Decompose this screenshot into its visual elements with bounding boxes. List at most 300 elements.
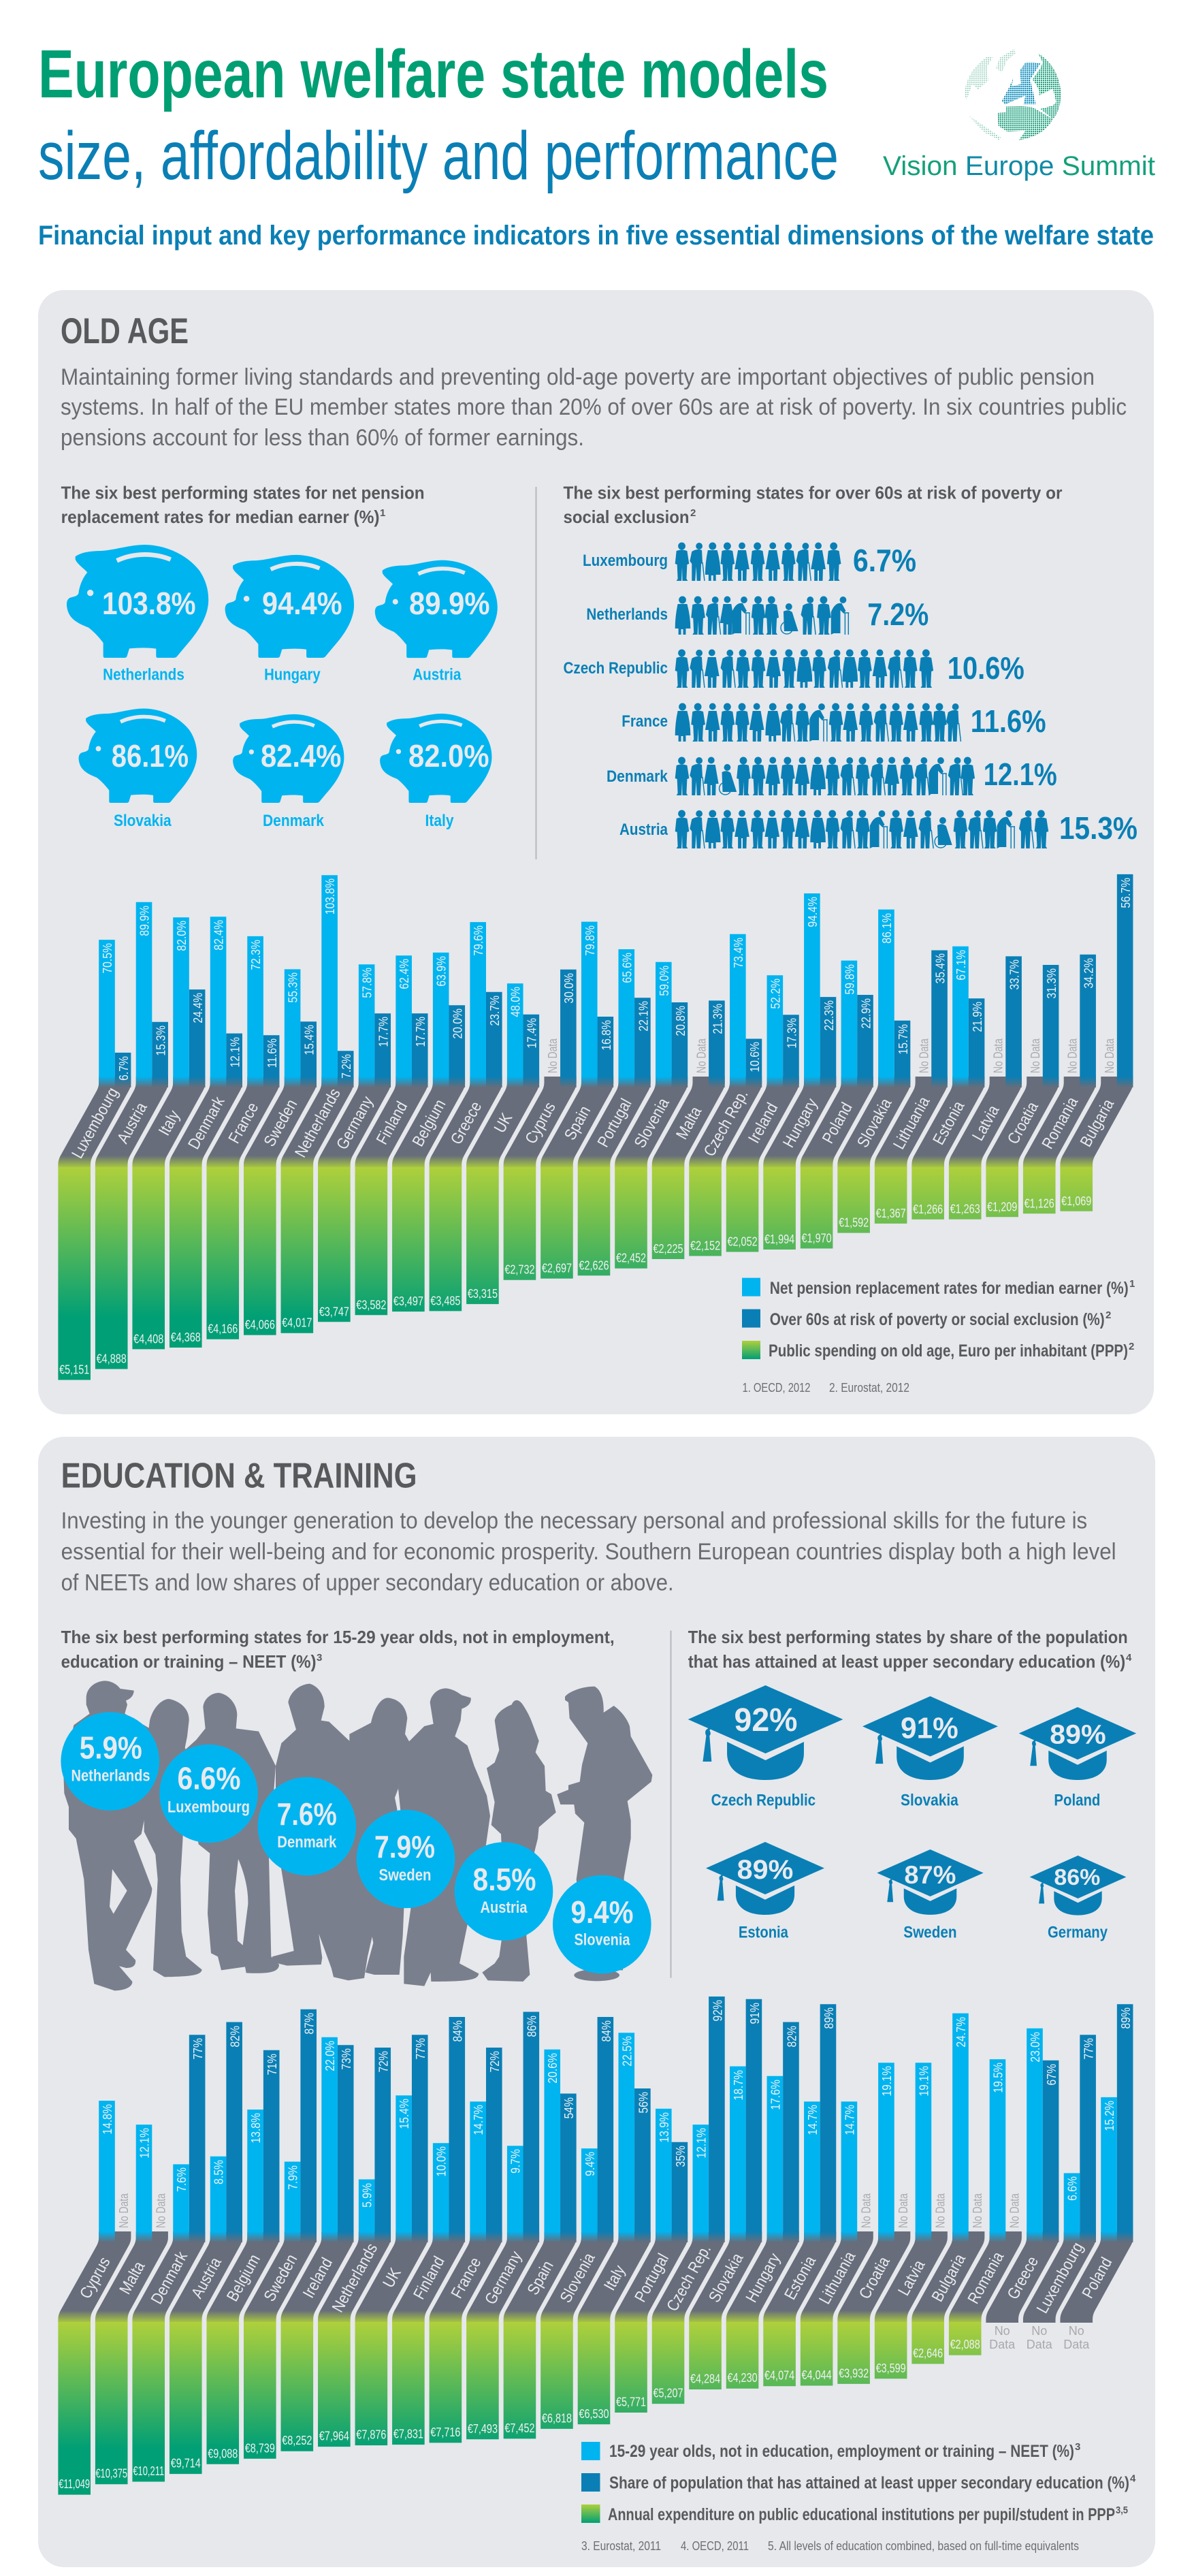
column: Greece: Greece: [447, 1098, 485, 1147]
column: Poland: 59.8%: [842, 964, 857, 995]
column: Malta: €10,375: [95, 2468, 127, 2481]
column: Belgium: €9,088: [208, 2447, 238, 2461]
column: Italy: 82.0%: [174, 921, 189, 951]
column: Belgium: 20.0%: [450, 1008, 465, 1039]
column: Hungary: Hungary: [779, 1095, 821, 1151]
column: Luxembourg: 70.5%: [100, 943, 114, 974]
legend: education chart: 3,5: [1116, 2505, 1128, 2516]
subheading: pension replacement rates: replacement rates for median earner (%): [61, 507, 380, 527]
intro text: old age: systems. In half of the EU member states more than 20% of over 60s are at risk of poverty. In six countries public: [61, 394, 1127, 420]
column: Sweden: 15.4%: [302, 1025, 317, 1055]
column: UK: [355, 2035, 428, 2445]
column: Slovenia: 84%: [599, 2020, 613, 2041]
icon: cap Poland: [1019, 1707, 1136, 1810]
column: Latvia: No Data: [934, 2193, 948, 2228]
column: Croatia: €1,209: [987, 1200, 1017, 1214]
column: Finland: 10.0%: [434, 2146, 449, 2177]
column: Portugal: Portugal: [594, 1096, 635, 1150]
column: Portugal: 65.6%: [619, 953, 634, 983]
bubble: Luxembourg: [159, 1745, 258, 1843]
column: Luxembourg: 77%: [1081, 2038, 1096, 2059]
column: Netherlands: Netherlands: [291, 1085, 344, 1160]
icon: piggy Austria: [375, 560, 498, 684]
column: Malta: 12.1%: [137, 2128, 152, 2159]
column: Estonia: [763, 2004, 836, 2386]
column: Germany: 9.7%: [508, 2149, 523, 2174]
bubble: Netherlands: 5.9%: [80, 1730, 142, 1766]
chart: education by country: [58, 1997, 1133, 2495]
legend: old age chart: 2: [1129, 1341, 1134, 1352]
column: Poland: Data: [1063, 2338, 1090, 2351]
icon: cap Czech Republic: Czech Republic: [711, 1792, 816, 1810]
column: Belgium: 71%: [265, 2054, 279, 2075]
column: Lithuania: Lithuania: [890, 1093, 933, 1152]
column: Netherlands: 103.8%: [323, 878, 337, 915]
column: Austria: 82%: [227, 2026, 242, 2047]
column: Italy: €4,408: [133, 1332, 163, 1346]
column: Czech Rep.: 73.4%: [731, 938, 745, 968]
column: Finland: 62.4%: [397, 959, 411, 989]
column: Ireland: 17.3%: [784, 1018, 799, 1049]
bubble: Netherlands: Netherlands: [71, 1767, 150, 1785]
column: Latvia: 33.7%: [1007, 959, 1022, 990]
subheading: NEET: [61, 1627, 615, 1672]
column: Luxembourg: Data: [1027, 2338, 1053, 2351]
column: Croatia: [837, 2063, 910, 2384]
column: France: 11.6%: [265, 1038, 279, 1068]
column: Lithuania: Lithuania: [816, 2248, 859, 2307]
column: Slovenia: €2,452: [616, 1251, 646, 1265]
column: Hungary: 94.4%: [805, 897, 820, 927]
icon: cap Poland: 89%: [1050, 1720, 1106, 1750]
column: Spain: 20.6%: [545, 2053, 560, 2084]
column: Cyprus: No Data: [546, 1038, 560, 1073]
legend: education chart: [581, 2441, 1136, 2524]
column: Italy: 22.5%: [619, 2036, 634, 2067]
column: Spain: [504, 2050, 577, 2438]
column: Denmark: 7.6%: [174, 2167, 189, 2192]
intro text: old age: [61, 364, 1127, 451]
bubble: Slovenia: 9.4%: [570, 1894, 633, 1930]
logo: Vision Europe Summit: [883, 49, 1155, 181]
row: Denmark: [607, 757, 1057, 795]
column: Czech Rep.: [689, 934, 762, 1256]
column: Cyprus: [58, 2101, 131, 2495]
column: Ireland: 52.2%: [768, 979, 783, 1009]
intro text: education: essential for their well-being and for economic prosperity. Southern European countries display both a high level: [61, 1539, 1116, 1565]
subheading: pension replacement rates: [61, 482, 425, 527]
legend: old age chart: Public spending on old age, Euro per inhabitant (PPP): [769, 1341, 1128, 1361]
column: Sweden: 87%: [302, 2013, 317, 2034]
column: Bulgaria: [1060, 874, 1133, 1211]
column: Germany: €7,493: [468, 2421, 498, 2436]
column: Estonia: 14.7%: [805, 2105, 820, 2135]
column: Croatia: Croatia: [855, 2253, 893, 2302]
column: Hungary: Hungary: [742, 2250, 784, 2306]
column: Poland: 22.9%: [858, 998, 873, 1029]
bubble: Sweden: Sweden: [378, 1866, 432, 1885]
column: Czech Rep.: Czech Rep.: [663, 2241, 715, 2315]
column: Czech Rep.: €2,152: [690, 1239, 720, 1253]
column: Denmark: [170, 917, 242, 1348]
title: second line: size, affordability and performance: [38, 118, 839, 194]
icon: cap Germany: 86%: [1054, 1864, 1100, 1890]
column: Germany: 17.7%: [376, 1017, 391, 1047]
column: Croatia: Croatia: [1004, 1098, 1042, 1147]
footnotes: education: [581, 2539, 1079, 2553]
row: Luxembourg: Luxembourg: [583, 552, 668, 570]
row: France: France: [622, 712, 668, 731]
subheading: over 60s at risk of poverty: social exclusion: [564, 507, 689, 527]
column: Romania: €1,126: [1024, 1196, 1054, 1211]
footnotes: education: 4. OECD, 2011: [681, 2539, 749, 2553]
column: Spain: 54%: [562, 2097, 577, 2118]
icon: cap Slovakia: [862, 1696, 998, 1810]
icon: cap Czech Republic: 92%: [734, 1702, 798, 1738]
column: Spain: Spain: [523, 2257, 557, 2298]
column: Finland: Finland: [372, 1098, 411, 1147]
column: Lithuania: €4,044: [802, 2368, 832, 2382]
column: UK: [466, 983, 539, 1304]
column: Bulgaria: Bulgaria: [1076, 1096, 1118, 1150]
column: Netherlands: [281, 875, 354, 1333]
column: Slovakia: [689, 1999, 762, 2389]
intro text: education: [61, 1508, 1116, 1596]
column: Greece: [430, 922, 502, 1311]
column: Italy: [132, 917, 205, 1349]
column: Latvia: [949, 956, 1022, 1220]
column: UK: 15.4%: [397, 2099, 411, 2129]
bubble: Sweden: 7.9%: [374, 1829, 435, 1864]
column: Greece: 23.0%: [1028, 2032, 1042, 2063]
icon: cap Poland: Poland: [1054, 1792, 1100, 1810]
column: Slovakia: 15.7%: [896, 1024, 910, 1055]
bubble: Austria: [455, 1842, 553, 1941]
column: Croatia: €3,932: [839, 2366, 869, 2381]
column: Poland: No: [1069, 2324, 1084, 2338]
column: Lithuania: No Data: [860, 2193, 873, 2228]
footnotes: old age: 1. OECD, 2012: [742, 1381, 810, 1395]
column: Germany: 57.8%: [359, 968, 374, 998]
row: Netherlands: 7.2%: [867, 597, 929, 632]
column: Slovakia: Slovakia: [705, 2250, 747, 2306]
column: Bulgaria: €2,646: [913, 2346, 943, 2360]
heading: education and training: EDUCATION & TRAINING: [61, 1457, 417, 1496]
icon: cap Estonia: [706, 1842, 824, 1942]
column: Bulgaria: No Data: [1103, 1038, 1117, 1073]
icon: piggy Denmark: [233, 714, 344, 830]
column: Slovenia: Slovenia: [630, 1094, 673, 1151]
column: France: 72%: [487, 2051, 502, 2072]
column: Romania: No Data: [1008, 2193, 1022, 2228]
subheading: over 60s at risk of poverty: [564, 482, 1062, 527]
row: Czech Republic: [564, 650, 1024, 688]
column: Poland: 89%: [1118, 2007, 1133, 2029]
column: Finland: €7,831: [393, 2427, 423, 2441]
icon: piggy Austria: 89.9%: [409, 586, 490, 621]
column: Portugal: [615, 2109, 688, 2413]
column: Latvia: No Data: [992, 1038, 1005, 1073]
column: Austria: 15.3%: [153, 1025, 168, 1056]
column: Malta: [95, 2125, 168, 2484]
intro text: education: Investing in the younger generation to develop the necessary personal and professional skills for the future is: [61, 1508, 1087, 1534]
column: Denmark: 82.4%: [211, 920, 226, 951]
bubble: Netherlands: [61, 1712, 159, 1811]
icon: piggy Slovakia: 86.1%: [112, 738, 189, 774]
column: Romania: 19.5%: [990, 2063, 1005, 2093]
column: Slovakia: €1,592: [839, 1215, 869, 1230]
people rows: over 60s at risk of poverty: [564, 542, 1137, 848]
bubble: Austria: Austria: [481, 1898, 528, 1917]
column: Denmark: €10,211: [133, 2465, 164, 2479]
subheading: over 60s at risk of poverty: The six best performing states for over 60s at risk of poverty or: [564, 482, 1062, 503]
column: Malta: Malta: [673, 1103, 705, 1143]
column: Luxembourg: No: [1031, 2324, 1047, 2338]
icon: piggy Slovakia: Slovakia: [114, 812, 172, 830]
column: Czech Rep.: 10.6%: [747, 1042, 762, 1072]
column: Slovakia: [837, 910, 910, 1233]
column: Malta: €2,225: [653, 1241, 683, 1256]
column: France: [430, 2048, 502, 2443]
column: Poland: [1060, 2004, 1133, 2351]
column: Slovakia: Slovakia: [854, 1095, 895, 1151]
column: Netherlands: 72%: [376, 2051, 391, 2072]
column: Romania: Romania: [1038, 1094, 1082, 1152]
column: Slovenia: 20.8%: [673, 1006, 688, 1036]
column: Ireland: €2,052: [728, 1235, 758, 1249]
column: Latvia: €3,599: [876, 2361, 906, 2375]
column: Poland: Poland: [1078, 2254, 1116, 2302]
column: Greece: No: [995, 2324, 1010, 2338]
icon: piggy Denmark: Denmark: [263, 812, 325, 830]
column: Portugal: 35%: [673, 2146, 688, 2167]
column: Latvia: 19.1%: [916, 2066, 931, 2097]
column: Poland: 15.2%: [1102, 2101, 1116, 2131]
column: Poland: [801, 961, 873, 1249]
column: Belgium: Belgium: [408, 1096, 449, 1149]
column: Cyprus: €2,732: [504, 1262, 534, 1277]
column: UK: €3,315: [468, 1286, 498, 1301]
column: Estonia: €4,074: [764, 2368, 794, 2383]
subheading: pension replacement rates: 1: [380, 507, 385, 519]
icon: cap Germany: [1030, 1856, 1126, 1942]
column: Austria: 8.5%: [211, 2160, 226, 2184]
column: Slovenia: [540, 2017, 613, 2429]
bubble: Denmark: Denmark: [277, 1833, 337, 1851]
footnotes: old age: 2. Eurostat, 2012: [829, 1381, 909, 1395]
column: Finland: 84%: [450, 2020, 465, 2041]
column: Malta: Malta: [116, 2258, 148, 2297]
column: Luxembourg: Luxembourg: [68, 1084, 122, 1162]
column: Luxembourg: Luxembourg: [1033, 2239, 1086, 2317]
column: Sweden: €4,066: [245, 1318, 275, 1332]
column: Ireland: 22.0%: [323, 2041, 337, 2071]
column: Cyprus: €11,049: [59, 2478, 90, 2492]
column: Greece: [986, 2029, 1059, 2351]
column: Belgium: [392, 953, 465, 1311]
column: Croatia: 31.3%: [1044, 968, 1059, 999]
column: Luxembourg: 6.7%: [116, 1056, 131, 1081]
column: Hungary: 22.3%: [822, 1000, 836, 1031]
column: Spain: €7,452: [504, 2421, 534, 2435]
column: Greece: 79.6%: [471, 925, 486, 956]
column: Slovakia: 18.7%: [731, 2070, 745, 2101]
icon: piggy Netherlands: 103.8%: [102, 586, 196, 621]
column: Portugal: €5,771: [616, 2395, 646, 2409]
column: Lithuania: [801, 2101, 873, 2386]
column: France: France: [225, 1099, 262, 1147]
column: Slovakia: 91%: [747, 2003, 762, 2024]
column: Sweden: 55.3%: [285, 972, 300, 1003]
column: Hungary: 17.6%: [768, 2080, 783, 2110]
column: Greece: Greece: [1003, 2253, 1042, 2302]
column: Italy: Italy: [155, 1107, 184, 1139]
column: Hungary: €4,230: [728, 2370, 758, 2385]
column: Lithuania: 35.4%: [933, 953, 948, 984]
column: UK: 17.4%: [524, 1018, 539, 1049]
column: Malta: [652, 1000, 725, 1259]
row: Luxembourg: [583, 542, 916, 581]
column: Croatia: No Data: [1029, 1038, 1043, 1073]
column: Malta: 21.3%: [710, 1004, 725, 1034]
bubble: Sweden: [357, 1810, 455, 1908]
column: Portugal: 13.9%: [657, 2112, 671, 2143]
column: Sweden: Sweden: [260, 2251, 301, 2304]
column: Finland: 17.7%: [413, 1017, 427, 1047]
icon: piggy Netherlands: Netherlands: [103, 666, 184, 684]
column: Hungary: [763, 893, 836, 1250]
footnotes: education: 5. All levels of education combined, based on full-time equivalents: [768, 2539, 1079, 2553]
column: Czech Rep.: [652, 1997, 725, 2404]
column: Italy: [578, 2033, 651, 2424]
column: Ireland: 73%: [339, 2048, 353, 2069]
column: Austria: €9,714: [171, 2456, 201, 2470]
column: Latvia: Latvia: [894, 2257, 929, 2299]
column: UK: 77%: [413, 2038, 427, 2059]
icon: piggy Italy: 82.0%: [408, 738, 489, 774]
column: Belgium: €3,497: [393, 1294, 423, 1309]
column: Cyprus: 14.8%: [100, 2104, 114, 2135]
column: Estonia: Estonia: [781, 2253, 820, 2303]
column: Greece: 67%: [1044, 2064, 1059, 2085]
intro text: old age: Maintaining former living standards and preventing old-age poverty are important objectives of public pension: [61, 364, 1095, 390]
column: Ireland: Ireland: [299, 2255, 336, 2301]
icon: piggy Italy: Italy: [425, 812, 454, 830]
column: France: [206, 936, 279, 1339]
column: Bulgaria: €1,069: [1061, 1194, 1091, 1208]
column: Romania: Romania: [964, 2248, 1007, 2307]
column: Czech Rep.: 92%: [710, 2000, 725, 2021]
column: Estonia: €1,266: [913, 1202, 943, 1216]
column: Spain: [540, 922, 613, 1279]
subheading: upper secondary education: that has attained at least upper secondary education (%): [688, 1651, 1125, 1672]
bubble: Denmark: [257, 1777, 356, 1875]
panel: old age: [38, 290, 1154, 1414]
column: Czech Rep.: Czech Rep.: [700, 1086, 752, 1160]
bubble: Denmark: 7.6%: [277, 1796, 337, 1832]
subheading: pension replacement rates: The six best performing states for net pension: [61, 482, 425, 503]
icon: cap Czech Republic: [688, 1685, 843, 1810]
column: Austria: Austria: [188, 2254, 225, 2302]
column: Denmark: €4,368: [171, 1330, 201, 1344]
column: Denmark: 12.1%: [227, 1037, 242, 1068]
column: Finland: [392, 2017, 465, 2445]
column: France: €7,716: [430, 2425, 460, 2439]
heading: old age: OLD AGE: [61, 311, 189, 351]
subheading: over 60s at risk of poverty: 2: [690, 507, 696, 519]
column: Romania: [949, 2059, 1022, 2355]
icon: piggy Denmark: 82.4%: [261, 738, 341, 774]
column: Romania: 34.2%: [1081, 958, 1096, 989]
column: Sweden: [244, 2009, 317, 2459]
row: Luxembourg: 6.7%: [853, 543, 916, 578]
column: Belgium: 63.9%: [434, 956, 449, 987]
column: Germany: €3,747: [319, 1305, 349, 1319]
column: Ireland: [726, 975, 799, 1252]
logo wordmark: Vision Europe Summit: [883, 151, 1155, 181]
column: Hungary: €1,994: [764, 1232, 794, 1246]
row: France: [622, 703, 1046, 742]
column: Romania: [1023, 955, 1096, 1213]
bubble: Slovenia: [553, 1875, 651, 1973]
column: Malta: No Data: [155, 2193, 168, 2228]
column: Germany: [318, 964, 391, 1322]
bubble: Luxembourg: 6.6%: [177, 1761, 241, 1796]
column: Estonia: 21.9%: [970, 1002, 984, 1032]
column: Bulgaria: [911, 2014, 984, 2364]
column: Italy: 24.4%: [191, 993, 205, 1023]
piggy banks: pension replacement rates: [67, 545, 498, 830]
column: Netherlands: €7,964: [319, 2429, 349, 2443]
column: Germany: [466, 2011, 539, 2439]
column: Slovakia: €4,284: [690, 2372, 720, 2386]
illustration: group of young people with NEET rates: [61, 1681, 652, 1990]
column: Spain: 79.8%: [583, 925, 597, 956]
subheading: upper secondary education: 4: [1126, 1652, 1132, 1664]
column: Sweden: €8,739: [245, 2441, 275, 2455]
column: Austria: 89.9%: [137, 906, 152, 936]
icon: cap Sweden: [877, 1849, 984, 1942]
column: Croatia: 19.1%: [880, 2066, 894, 2097]
legend: old age chart: [742, 1278, 1135, 1361]
column: Belgium: [206, 2050, 279, 2464]
icon: cap Sweden: Sweden: [903, 1924, 957, 1942]
panel: education and training: [38, 1437, 1155, 2567]
icon: piggy Italy: [380, 714, 491, 830]
column: Spain: Spain: [561, 1102, 594, 1143]
column: Hungary: 82%: [784, 2026, 799, 2047]
column: Ireland: €8,252: [282, 2433, 312, 2448]
column: Spain: €2,697: [542, 1261, 572, 1275]
icon: piggy Hungary: 94.4%: [262, 586, 342, 621]
column: Slovenia: 9.4%: [583, 2152, 597, 2176]
column: Greece: 23.7%: [487, 996, 502, 1026]
column: Slovenia: Slovenia: [556, 2249, 598, 2306]
column: Denmark: [132, 2035, 205, 2481]
graduation caps: upper secondary education: [688, 1685, 1136, 1942]
column: France: €4,166: [208, 1322, 238, 1336]
column: Poland: Poland: [818, 1099, 856, 1147]
column: Croatia: No Data: [897, 2193, 910, 2228]
column: Luxembourg: 6.6%: [1065, 2176, 1080, 2201]
column: Czech Rep.: 12.1%: [694, 2128, 709, 2159]
column: Finland: Finland: [410, 2253, 448, 2302]
column: Germany: Germany: [333, 1093, 377, 1153]
column: Cyprus: No Data: [117, 2193, 131, 2228]
column: France: 14.7%: [471, 2105, 486, 2135]
column: Greece: €3,485: [430, 1294, 460, 1308]
column: Austria: €4,888: [97, 1352, 127, 1366]
